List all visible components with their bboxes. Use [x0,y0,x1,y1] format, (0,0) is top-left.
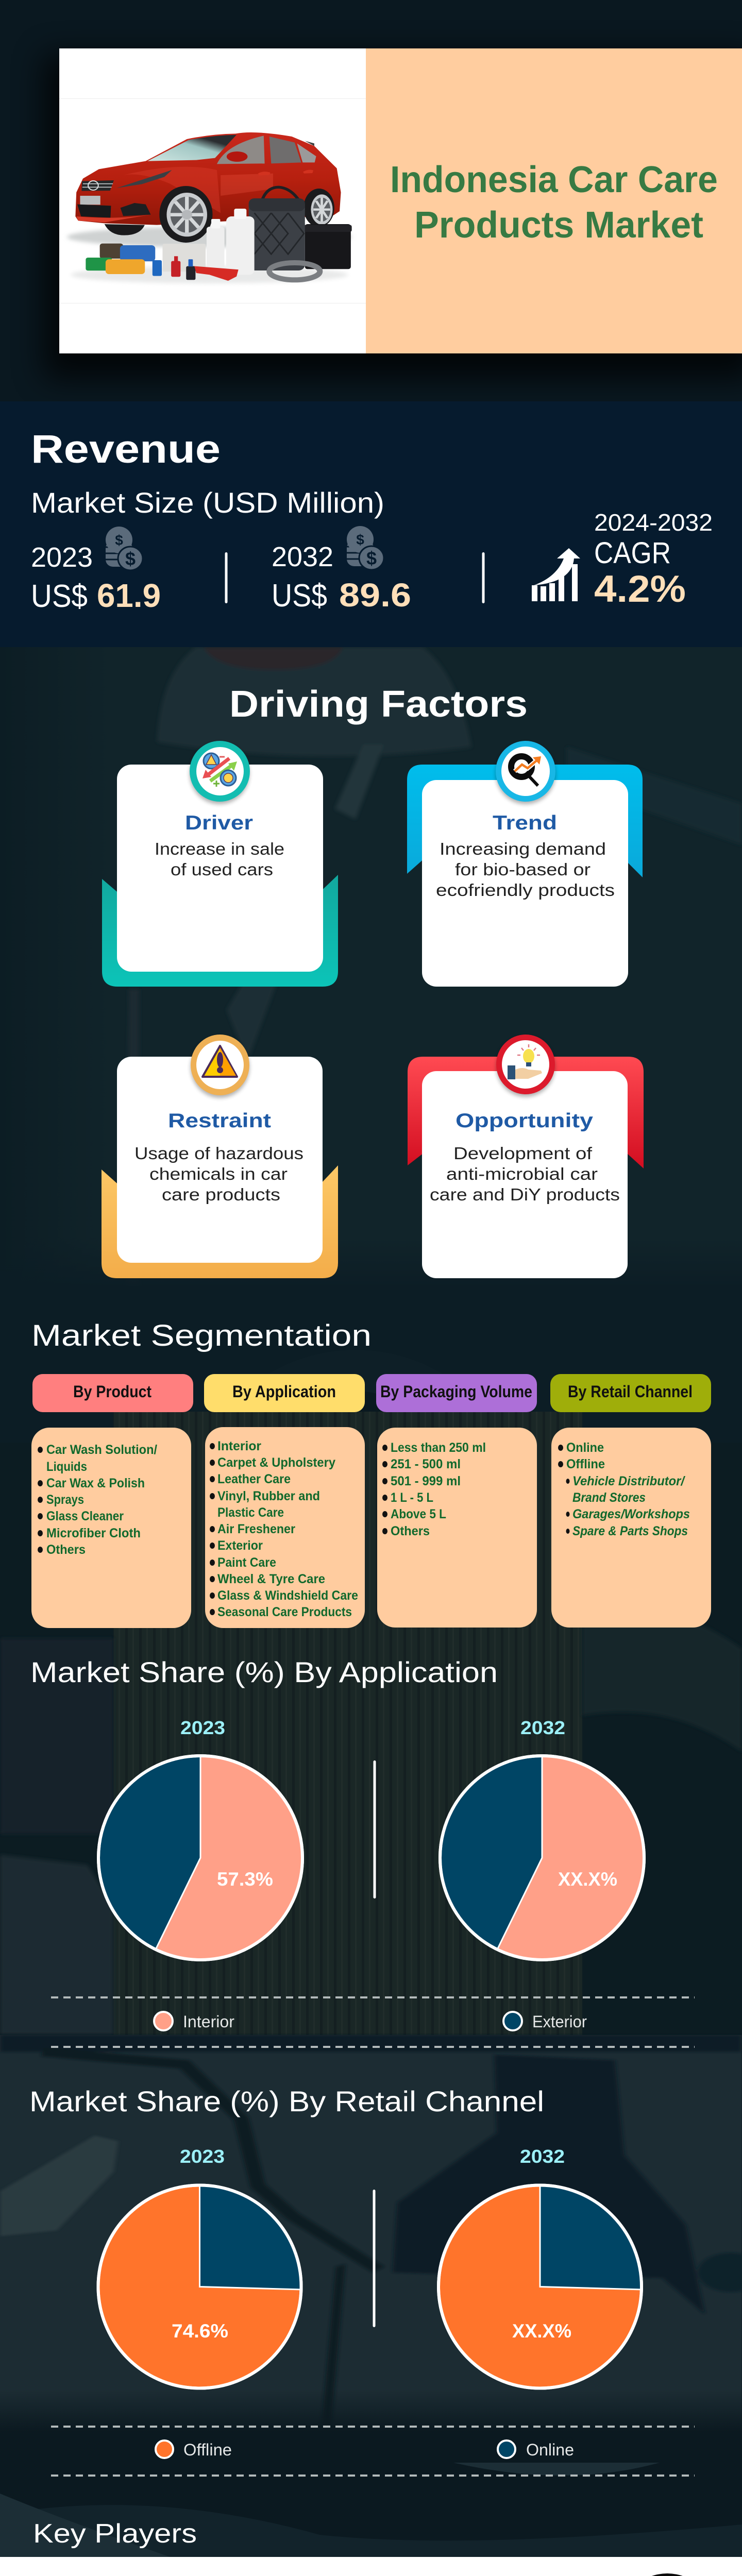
divider [373,2190,375,2327]
driver title: Driver [185,812,253,834]
driver text [155,839,284,879]
hero panel: title [59,48,742,353]
segment list: by product: Liquids [46,1460,87,1474]
restraint text [134,1144,303,1204]
opportunity text: care and DiY products [430,1185,620,1204]
segment list: by product [31,1428,191,1628]
stat: 2023 revenue: 61.9 [97,577,161,614]
stat: 2032 revenue: 89.6 [339,577,411,614]
icon: coins 2023 [106,527,143,570]
segment list: by application: Paint Care [217,1555,276,1570]
key players panel [0,2557,742,2576]
segment list: by packaging volume: Above 5 L [391,1507,446,1521]
segment list: by retail channel: Online [566,1440,604,1455]
opportunity text: anti-microbial car [446,1164,598,1183]
segment list: by application: Seasonal Care Products [217,1605,352,1619]
stat: CAGR: 4.2% [594,568,686,610]
icon: driver badge [190,741,250,804]
trend text: Increasing demand [440,839,606,858]
divider [225,552,228,603]
segment list: by packaging volume: Less than 250 ml [391,1440,486,1455]
pie chart: retail channel 2023: 2023 [180,2146,225,2167]
heading: driving factors: Driving Factors [229,684,528,725]
card: driver [102,741,338,987]
segment list: by application [205,1427,365,1628]
segment list: by product: Others [46,1543,86,1557]
pie chart: application 2023 [98,1717,302,1960]
stat: 2032 revenue: US$ [272,578,327,614]
pie chart: application 2032 [440,1717,644,1960]
pie chart: retail channel 2032: XX.X% [512,2320,571,2342]
icon: growth arrow chart [532,548,580,601]
icon: restraint badge [191,1035,249,1098]
icon: coins 2032: $ [356,532,364,548]
segment tab: by application: By Application [232,1382,336,1401]
pie chart: retail channel 2023: 74.6% [172,2320,228,2342]
icon: coins 2032 [347,526,384,570]
trend text: for bio-based or [455,860,591,879]
segment list: by application: Glass & Windshield Care [217,1588,358,1603]
segment list: by product: Microfiber Cloth [46,1526,141,1540]
legend: retail channel: Offline [183,2441,232,2459]
opportunity text [430,1144,620,1204]
segment list: by application: Interior [217,1439,261,1453]
pie chart: application 2023: 57.3% [217,1869,273,1890]
heading: market share by application: Market Share (%) By Application [30,1656,498,1688]
heading: key players: Key Players [33,2519,197,2549]
card: restraint [102,1035,338,1278]
legend: application [154,2012,587,2031]
stat: CAGR [594,509,713,610]
pie chart: application 2032: XX.X% [558,1869,617,1890]
opportunity title: Opportunity [456,1110,593,1132]
pie chart: retail channel 2023 [98,2146,301,2388]
segment tab: by retail channel: By Retail Channel [568,1382,693,1401]
hero title panel: Products Market [414,205,703,246]
icon: opportunity badge [496,1035,555,1097]
stat: 2032 revenue [272,526,411,614]
segment list: by retail channel: Spare & Parts Shops [572,1524,688,1538]
segment list: by application: Exterior [217,1538,263,1553]
segment list: by packaging volume: Others [391,1524,430,1538]
segment tab: by retail channel [550,1374,711,1412]
hero shadow [44,54,742,379]
segment list: by product: Car Wash Solution/ [46,1443,157,1457]
segment list: by application: Leather Care [217,1472,291,1486]
illustration: red car and car care products [67,132,352,283]
heading: market segmentation: Market Segmentation [31,1319,372,1352]
hero title panel [366,48,742,353]
hero image panel [59,48,366,353]
market size subheading: Market Size (USD Million) [31,486,384,519]
segment list: by application: Air Freshener [217,1522,295,1536]
segment list: by application: Vinyl, Rubber and [217,1489,320,1503]
segment list: by packaging volume [377,1428,537,1628]
segment list: by application: Plastic Care [217,1505,284,1520]
segment tab: by product [32,1374,193,1412]
driver text: of used cars [171,860,273,879]
legend: retail channel: Online [526,2441,574,2459]
segment list: by product: Car Wax & Polish [46,1476,145,1490]
hero title panel: Indonesia Car Care [390,159,718,200]
restraint text: care products [162,1185,280,1204]
segment list: by retail channel: Brand Stores [572,1490,646,1505]
restraint text: chemicals in car [149,1164,288,1183]
stat: 2032 revenue: 2032 [272,541,333,572]
segment list: by packaging volume: 1 L - 5 L [391,1490,433,1505]
segment tab: by application [204,1374,365,1412]
stat: 2023 revenue: 2023 [31,542,93,573]
pie chart: application 2032: 2032 [520,1717,565,1738]
segment list: by packaging volume: 501 - 999 ml [391,1474,461,1488]
segment tab: by packaging volume: By Packaging Volume [380,1382,532,1401]
pie chart: retail channel 2032 [439,2146,642,2388]
trend text [436,839,615,900]
stat: 2023 revenue [31,527,161,614]
segment list: by retail channel: Offline [566,1457,605,1471]
revenue heading: Revenue [31,427,221,471]
segment list: by retail channel [551,1428,711,1628]
legend: application: Exterior [532,2012,587,2031]
pie chart: retail channel 2032: 2032 [520,2146,565,2167]
icon: trend badge [496,741,555,804]
segment list: by retail channel: Garages/Workshops [572,1507,690,1521]
segment tab: by product: By Product [73,1382,151,1401]
stat: CAGR: CAGR [594,536,671,570]
pie chart: application 2023: 2023 [180,1717,225,1738]
divider [482,552,484,603]
legend: retail channel [156,2441,574,2459]
icon: coins 2032: $ [366,548,377,569]
revenue panel [0,401,742,647]
card: trend [407,741,643,987]
opportunity text: Development of [453,1144,593,1163]
stat: 2023 revenue: US$ [31,579,88,614]
stat: CAGR: 2024-2032 [594,509,713,536]
icon: coins 2023: $ [125,548,136,569]
segment list: by packaging volume: 251 - 500 ml [391,1457,461,1471]
segment tab: by packaging volume [376,1374,537,1412]
segment list: by application: Wheel & Tyre Care [217,1572,325,1586]
icon: coins 2023: $ [115,532,123,548]
trend title: Trend [493,812,557,834]
segment list: by application: Carpet & Upholstery [217,1455,335,1470]
legend: application: Interior [183,2012,234,2031]
segment list: by retail channel: Vehicle Distributor/ [572,1474,686,1488]
trend text: ecofriendly products [436,880,615,900]
segment list: by product: Glass Cleaner [46,1509,124,1523]
restraint text: Usage of hazardous [134,1144,303,1163]
driver text: Increase in sale [155,839,284,858]
restraint title: Restraint [168,1110,271,1132]
card: opportunity [408,1035,644,1278]
heading: market share by retail channel: Market Share (%) By Retail Channel [29,2085,544,2117]
logo: Chemical Guys [652,2573,683,2576]
segment list: by product: Sprays [46,1493,84,1507]
divider [373,1760,376,1899]
